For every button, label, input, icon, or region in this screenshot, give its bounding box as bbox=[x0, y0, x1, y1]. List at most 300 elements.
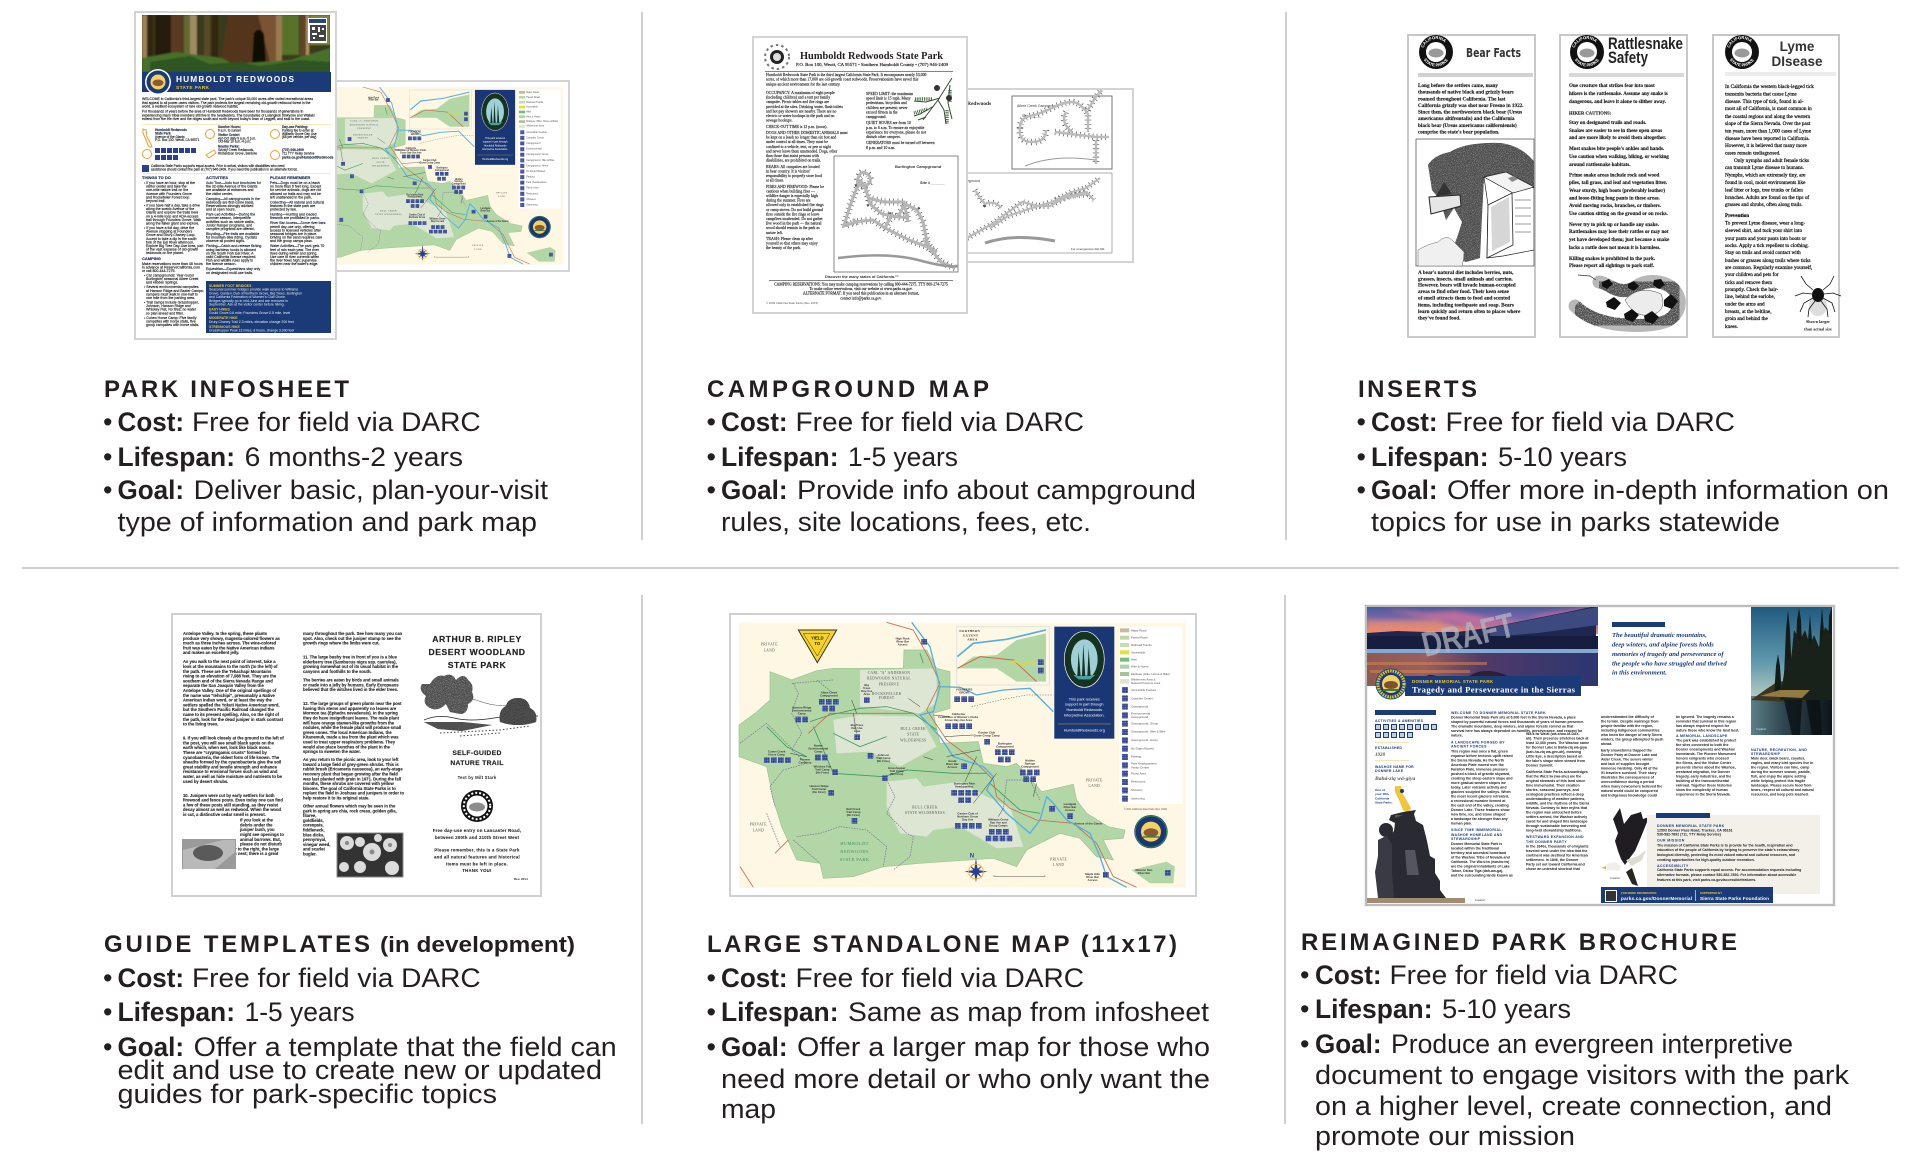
lifespan line: 5-10 years bbox=[1442, 994, 1571, 1024]
left column rules: and hot pay showers are nearby. There are no bbox=[766, 109, 836, 113]
map labels: Access bbox=[1065, 808, 1075, 812]
map labels: California bbox=[952, 712, 965, 716]
cost line: Free for field via DARC bbox=[796, 963, 1084, 993]
column: memorial landscape: westward migration, the Donner bbox=[1675, 770, 1731, 774]
heading: guide templates: GUIDE TEMPLATES bbox=[104, 931, 370, 958]
column: activities: for mountain bike riding. Cyclists bbox=[206, 236, 257, 240]
map labels: Day-Use bbox=[861, 689, 873, 693]
illustration: desert landscape bbox=[421, 675, 538, 736]
goal lines: Goal: bbox=[118, 1032, 184, 1062]
cost line: • bbox=[706, 963, 716, 993]
map labels: Natural Preserve Area bbox=[1131, 681, 1161, 685]
callout: hikes box: Grove, Garden Club of Northern Grove, Big Trees, Burlington bbox=[209, 291, 302, 295]
panel: park contact: features at this park, visit parks.ca.gov/accessiblefeatures. bbox=[1657, 878, 1756, 882]
cost line: Free for field via DARC bbox=[192, 963, 481, 993]
intro text: WELCOME to California's third-largest state park. The park's unique 53,000 acres offer varied recreational areas bbox=[142, 97, 313, 101]
map labels: Horse Camp bbox=[768, 752, 785, 756]
map labels: © 2011 California State Parks (Rev. 2020) bbox=[1124, 808, 1167, 811]
column: things to do: Make reservations more than 48 hours bbox=[142, 262, 203, 266]
panel: park contact: alternative formats, please contact 530-582-7892. For information about accessible bbox=[1657, 873, 1796, 877]
map labels: Paved Road bbox=[1131, 636, 1148, 640]
thumbnail: fold-out park map: Accessible bbox=[526, 106, 539, 109]
left column rules: wood should remain in the park as bbox=[766, 226, 820, 230]
lyme text: groin and behind the bbox=[1725, 316, 1768, 322]
map labels: Campground bbox=[996, 744, 1014, 748]
panel: campground map bbox=[706, 37, 1196, 537]
thumbnail: fold-out park map: Campfire Center bbox=[526, 137, 544, 140]
map labels: BULL CREEK bbox=[900, 727, 926, 731]
left column rules: allowed only in established fire rings bbox=[766, 203, 824, 207]
thumbnail: fold-out park map: HumboldtRedwoods.org bbox=[482, 158, 509, 161]
column: welcome and landscape: California. The Wá:š:iw (washo:iw) bbox=[1451, 860, 1509, 864]
lifespan line bbox=[706, 997, 1210, 1027]
right column rules: p.m. to 6 a.m. To ensure an enjoyable bbox=[866, 126, 925, 130]
left column rules: DOGS AND OTHER DOMESTIC ANIMALS must bbox=[766, 131, 849, 135]
right column rules: speed limit is 15 mph. Many bbox=[866, 97, 911, 101]
map labels: This park receives bbox=[1069, 697, 1100, 701]
column: things to do: beyond trail. bbox=[146, 199, 165, 203]
safety text: Prime snake areas include rock and wood bbox=[1569, 173, 1660, 179]
heading: inserts: INSERTS bbox=[1358, 376, 1477, 403]
column: things to do: one-mile nature trail on the bbox=[146, 188, 188, 192]
guide directions: Free day-use entry on Lancaster Road, bbox=[433, 828, 521, 833]
intro paragraph: Humboldt Redwoods State Park is the third largest California State Park. It encompasses nearly 53,000 bbox=[766, 73, 927, 78]
map labels: Day Use bbox=[962, 818, 974, 822]
cost line: Free for field via DARC bbox=[1390, 960, 1678, 990]
cost line: Cost: bbox=[118, 963, 184, 993]
column: donner party: people familiar with the region, bbox=[1601, 724, 1653, 728]
column: memorial landscape: nature those who know the land best. bbox=[1676, 728, 1739, 732]
column: welcome and landscape: SINCE TIME IMMEMORIAL: bbox=[1451, 828, 1503, 832]
map labels: River Bar bbox=[1064, 805, 1077, 809]
panel: park contact: ACCESSIBILITY bbox=[1657, 864, 1689, 868]
map labels: N bbox=[970, 854, 974, 860]
heading: guide templates: (in development) bbox=[380, 932, 575, 957]
goal lines: Goal: bbox=[721, 475, 788, 505]
column: please remember: permit day-use only, offering bbox=[270, 225, 314, 229]
column: memorial landscape: railroad. Together these histories bbox=[1676, 784, 1732, 788]
column: things to do: visitor center and take the bbox=[146, 185, 187, 189]
cost line: • bbox=[103, 407, 112, 437]
column: memorial landscape: Donner encampments and Washoe bbox=[1676, 748, 1735, 752]
map labels: Showers bbox=[1131, 788, 1143, 792]
map labels: Springs bbox=[1025, 761, 1036, 765]
column: things to do: THINGS TO DO bbox=[142, 175, 171, 180]
intro text: americanus altifrontalis) and the California bbox=[1418, 115, 1515, 122]
left column rules: sewage hookups. bbox=[766, 119, 793, 123]
thumbnail: fold-out park map bbox=[264, 81, 569, 271]
lyme text: sleeved shirt, and tuck your shirt into bbox=[1725, 228, 1802, 234]
callout: hikes box: and California Federation of Women's Club Grove. bbox=[209, 295, 286, 299]
lifespan line: Same as map from infosheet bbox=[848, 997, 1210, 1027]
column: nature and recreation: eagles, and many bird species live in bbox=[1751, 761, 1813, 765]
column: activities: the visitor center. bbox=[206, 192, 233, 196]
intro text: experiencing many tribal members still live in the headwaters. The boundaries of Lolangkok Sinkyone and Wailaki bbox=[142, 113, 315, 117]
thumbnail: back page campground maps: Redwoods bbox=[967, 101, 991, 107]
map labels: Area bbox=[864, 692, 870, 696]
map labels: LAND bbox=[764, 648, 775, 652]
illustration: rattlesnake bbox=[1575, 275, 1679, 325]
guide column 1: the path. These are the Tehachapi Mountains bbox=[183, 669, 272, 674]
map labels: Campground: Group bbox=[1131, 721, 1159, 725]
map labels: PRIVATE bbox=[1086, 778, 1103, 782]
map labels: Major Road bbox=[1131, 628, 1147, 632]
guide subtitle: SELF-GUIDED bbox=[452, 750, 502, 757]
map labels: Baxter bbox=[814, 743, 824, 747]
map labels: Hanson Ridge bbox=[809, 784, 829, 788]
column: culture and expansion: THE DONNER PARTY bbox=[1526, 840, 1567, 844]
column: memorial landscape: has always required respect for bbox=[1676, 724, 1730, 728]
thumbnail: fold-out park map: Restrooms bbox=[526, 192, 539, 195]
title bbox=[1608, 35, 1683, 67]
column: culture and expansion: wildlife, and the rhythms of the Sierra bbox=[1525, 802, 1589, 806]
guide column 2: replant the field in Joshuas and junipers in order to bbox=[303, 791, 404, 796]
column: donner party: who knew the danger of early Sierra bbox=[1600, 733, 1662, 737]
map labels: Campground: Hike & Bike bbox=[1131, 730, 1166, 734]
column: welcome and landscape: today. Later volcanic activity and bbox=[1451, 786, 1507, 790]
column: things to do: fork of the Eel River afternoon. bbox=[146, 240, 194, 244]
captions: Caption bbox=[1610, 876, 1621, 880]
column: things to do: Avenue with Founders Grove bbox=[146, 192, 192, 196]
guide directions: and all natural features and historical bbox=[434, 854, 520, 860]
cost line: • bbox=[1300, 960, 1309, 990]
column: things to do: Giants and explore the trails here bbox=[146, 211, 198, 215]
icons and visitor info bbox=[142, 125, 334, 172]
guide column 1: Antelope Valley. In the spring, these plants bbox=[183, 631, 268, 636]
column: welcome and landscape: a recessional moraine formed at bbox=[1451, 799, 1506, 803]
lyme text: ticks and remove them bbox=[1725, 280, 1772, 286]
icons and visitor info: ($8 per vehicle, per day) bbox=[282, 135, 316, 139]
column: welcome and landscape: more gradual western slopes we bbox=[1451, 781, 1506, 785]
map labels: High Rock bbox=[896, 636, 910, 640]
guide column 2: vinegar weed, bbox=[303, 842, 330, 847]
column: things to do: campers must walk in one-half to bbox=[146, 292, 198, 296]
map labels: AREA bbox=[967, 638, 978, 642]
map labels: LAND bbox=[1089, 784, 1100, 788]
column: things to do: • Several environmental campsites bbox=[144, 285, 199, 289]
column: welcome and landscape: Donner Memorial State Park is bbox=[1451, 842, 1502, 846]
left column rules: OCCUPANCY: A maximum of eight people bbox=[766, 91, 835, 95]
intro paragraph: unique ancient environment for the last century. bbox=[766, 82, 840, 86]
guide column 1: is cut, a distinctive cedar smell is present. bbox=[183, 812, 266, 817]
thumbnail: fold-out park map: Avenue of the Giants bbox=[487, 220, 510, 223]
map labels: (No Fires) bbox=[877, 759, 890, 763]
column: welcome and landscape: creating the steep eastern slope and bbox=[1451, 777, 1512, 781]
column: culture and expansion: traveled west under the idea that the bbox=[1526, 849, 1588, 853]
column: things to do: along the scenic Avenue of the bbox=[146, 207, 194, 211]
campground map: Burlington: Burlington Campground bbox=[895, 164, 942, 169]
lyme text: Stay on trails and avoid contact with bbox=[1725, 250, 1801, 256]
column: welcome and landscape: The dramatic mountains, deep winters, and alpine forests remind us that bbox=[1451, 724, 1574, 728]
goal lines bbox=[103, 475, 549, 537]
column: things to do: • Trail camps include Grasshopper, bbox=[144, 300, 199, 304]
footer text: To make online reservations, visit our website at www.parks.ca.gov. bbox=[809, 287, 913, 292]
panel: park contact: California State Parks supports equal access. For accommodation requests including bbox=[1657, 868, 1801, 872]
goal lines: Deliver basic, plan-your-visit bbox=[194, 475, 549, 505]
thumbnail: fold-out park map: Campground bbox=[452, 182, 466, 185]
lyme text: Prevention bbox=[1725, 213, 1749, 219]
column: culture and expansion: time immemorial. Their creation bbox=[1526, 784, 1580, 788]
map labels: Campground bbox=[1131, 705, 1149, 709]
thumbnail: fold-out park map: Parking bbox=[526, 176, 535, 179]
icons and visitor info: parks.ca.gov/HumboldtRedwoods bbox=[282, 156, 334, 160]
safety text: dangerous, and leave it alone to slither away. bbox=[1569, 99, 1667, 105]
guide column 2: goldfields, bbox=[303, 818, 324, 823]
map labels: Hike & Horse bbox=[1131, 665, 1149, 669]
right column rules: pedestrians, bicyclists and bbox=[866, 101, 907, 106]
icons and visitor info: Parking fee to enter at bbox=[282, 128, 313, 132]
column: activities: the 32-mile Avenue of the Giants bbox=[206, 185, 258, 189]
column: please remember: firearms are prohibited in parks. bbox=[270, 216, 320, 220]
quote: memories of tragedy and perseverance of bbox=[1612, 651, 1724, 658]
thumbnail: fold-out park map: CARL "A" ANDERSON bbox=[350, 120, 379, 123]
guide column 2: green cones. The local American Indians, the bbox=[303, 730, 392, 735]
map labels: Trail Camp bbox=[876, 756, 891, 760]
quote: deep winters, and alpine forests holds bbox=[1612, 642, 1714, 649]
panel: park contact bbox=[1647, 813, 1820, 894]
cost line: • bbox=[1356, 407, 1366, 437]
column: please remember: Use care in river currents when bbox=[270, 255, 319, 259]
map labels: Campground bbox=[820, 694, 838, 698]
goal lines: • bbox=[1300, 1029, 1309, 1059]
illustration: bald eagle bbox=[1601, 808, 1649, 886]
column: memorial landscape: presents stories about the Washoe, bbox=[1676, 766, 1736, 770]
map labels: NORTHERN bbox=[959, 629, 980, 633]
lyme text: bushes or grasses along trails where ticks bbox=[1725, 258, 1811, 264]
sidebar: activities and facts: ACTIVITIES & AMENITIES bbox=[1375, 719, 1424, 723]
sidebar: activities and facts: WASHOE NAME FOR bbox=[1375, 765, 1414, 769]
icons and visitor info: Apr-Oct daily 9 a.m.-5 p.m. bbox=[218, 136, 256, 140]
thumbnail: fold-out park map: WILDERNESS bbox=[372, 165, 390, 168]
map labels: LAND bbox=[1053, 863, 1064, 867]
map labels: LAND bbox=[753, 828, 764, 832]
column: activities: Fish and wildlife rules apply in bbox=[206, 259, 253, 263]
column: things to do: Explore Big Tree Day-Use Area, part bbox=[146, 244, 203, 248]
column: things to do: Grove and Drury-Chaney Loop. bbox=[146, 233, 196, 237]
map labels: support in part through bbox=[1065, 703, 1104, 707]
lifespan line: 5-10 years bbox=[1498, 442, 1627, 472]
diet text: However, bears will invade human-occupied bbox=[1418, 283, 1516, 289]
guide directions: between 200th and 210th Street West bbox=[435, 835, 519, 840]
column: welcome and landscape: STEWARDSHIP bbox=[1451, 837, 1481, 841]
map labels: Trail Camp bbox=[815, 767, 830, 771]
intro text: For thousands of years before the area of Humboldt Redwoods have been for thousands of generations in bbox=[142, 110, 303, 114]
column: things to do: group campsites with horse stalls. bbox=[146, 323, 199, 327]
guide column 1: As you walk to the next point of interest, take a bbox=[183, 659, 276, 664]
guide cover title: DESERT WOODLAND bbox=[428, 647, 526, 657]
map labels: BULL CREEK bbox=[912, 805, 938, 809]
right column rules: exceed fifteen in the bbox=[866, 110, 898, 114]
column: welcome and landscape: Farallon Plate, immense pressure bbox=[1451, 768, 1508, 772]
map labels: (No Fires) bbox=[890, 772, 903, 776]
column: welcome and landscape: This region was once a flat, green bbox=[1451, 750, 1508, 754]
map labels: River Bar bbox=[946, 762, 959, 766]
title: Safety bbox=[1608, 49, 1649, 67]
thumbnail: fold-out park map: FOREST bbox=[358, 136, 368, 139]
map labels: Environmental bbox=[792, 708, 812, 712]
map labels: Interpretive Association. bbox=[1064, 713, 1105, 717]
column: welcome and landscape: Tahoe, Dá'aw Tiga (dah-aw-ga), bbox=[1451, 869, 1503, 873]
lifespan line: Lifespan: bbox=[721, 442, 838, 472]
lyme text: leaf litter or logs, tree trunks or fallen bbox=[1725, 186, 1803, 193]
icon: seal bbox=[1570, 35, 1604, 69]
panel: park contact: education of the people of California by helping to preserve the state's extraordinary bbox=[1657, 848, 1799, 852]
left column rules: or camp stoves. Do not build ground bbox=[766, 208, 823, 212]
guide column 2: blooms. The goal of California State Parks is to bbox=[303, 786, 396, 791]
map labels: Maxxon Run bbox=[1136, 868, 1153, 872]
column: welcome and landscape: territory and ancestral homeland bbox=[1451, 851, 1506, 855]
guide column 1: American Indian word, or at least the way the bbox=[183, 698, 273, 703]
column: things to do: so plan ahead and filter. bbox=[146, 311, 184, 315]
guide column 1: used by desert shrubs. bbox=[183, 779, 228, 784]
quote: the people who have struggled and thrived bbox=[1612, 660, 1727, 667]
banner: park name: HUMBOLDT REDWOODS bbox=[176, 74, 294, 84]
column: welcome and landscape: WASHOE HOMELAND AND bbox=[1451, 833, 1503, 837]
column: nature and recreation: resources, and keep pets leashed. bbox=[1751, 792, 1809, 796]
guide column 2: spot. Also, check out the juniper stump to see the bbox=[303, 636, 402, 641]
guide column 1: sheaths formed by the cyanobacteria give the soil bbox=[183, 760, 281, 765]
thumbnail: fold-out park map: Grove Group Camp bbox=[419, 161, 441, 164]
left column rules: TRASH: Please clean up after bbox=[766, 237, 814, 241]
guide column 2: many throughout the park. See how many you can bbox=[303, 631, 403, 636]
map labels: REDWOODS NATURAL bbox=[867, 677, 911, 681]
map labels: PRIVATE bbox=[750, 823, 767, 827]
guide column 1: to the living trees. bbox=[183, 722, 218, 727]
heading: reimagined park brochure: REIMAGINED PARK BROCHURE bbox=[1301, 929, 1737, 956]
right column rules: GENERATORS must be turned off between bbox=[866, 141, 935, 145]
column: activities: Fishing—Catch-and-release fishing bbox=[206, 244, 261, 248]
map labels: River Bar bbox=[896, 639, 910, 643]
map labels: Albee Creek bbox=[821, 691, 838, 695]
column: donner party: Alder Creek. The severe winter bbox=[1601, 758, 1653, 762]
map labels: Cemetery bbox=[799, 760, 812, 764]
right column rules: 8 p.m. and 10 a.m. bbox=[866, 146, 895, 150]
column: donner party: illustrates the consequences of bbox=[1601, 776, 1655, 780]
column: please remember: Hunting—Hunting and loaded bbox=[270, 213, 317, 217]
thumbnail: fold-out park map: Wilderness Area bbox=[526, 125, 545, 128]
icons and visitor info: State Park bbox=[155, 131, 171, 135]
column: culture and expansion: California State Parks acknowledges bbox=[1526, 770, 1588, 774]
icons and visitor info: Williams Grove Day Use bbox=[282, 132, 317, 136]
map labels: Maple Hills bbox=[1085, 872, 1100, 876]
safety text: Please report all sightings to park staff. bbox=[1569, 263, 1655, 269]
safety text: and are more likely to avoid them altogether. bbox=[1569, 135, 1667, 141]
thumbnail: fold-out park map: Picnic Area bbox=[526, 187, 539, 190]
map labels: TO bbox=[814, 641, 821, 646]
guide column 2: As you return to the picnic area, look to your left bbox=[303, 757, 399, 762]
thumbnail: fold-out park map: Springs bbox=[455, 180, 464, 183]
goal lines: edit and use to create new or updated bbox=[118, 1055, 602, 1085]
map labels: Area bbox=[854, 729, 861, 733]
panel: large standalone map bbox=[706, 614, 1210, 1124]
thumbnail: fold-out park map: Campground bbox=[526, 142, 541, 145]
icons and visitor info: P.O. Box 100, Weott, CA 95571 bbox=[155, 138, 200, 142]
map labels: Pioneer bbox=[800, 757, 811, 761]
cost line: Cost: bbox=[118, 407, 184, 437]
photo: wildflowers bbox=[337, 833, 403, 877]
guide column 2: used to treat upper respiratory problems. They bbox=[303, 740, 396, 744]
column: things to do: Avenue stopping at Founders bbox=[146, 230, 193, 234]
map labels: Environmental bbox=[808, 746, 828, 750]
column: things to do: redwoods on the planet. bbox=[146, 251, 184, 255]
map labels: Wilderness Area & bbox=[1131, 677, 1156, 681]
column: memorial landscape: tragedy, early industries, and the bbox=[1676, 774, 1731, 778]
map labels: CARL "A" ANDERSON bbox=[868, 671, 910, 675]
column: memorial landscape: A MEMORIAL LANDSCAPE bbox=[1676, 734, 1728, 738]
safety text: Never try to pick up or handle any snake. bbox=[1569, 222, 1660, 228]
guide column 1: the path, look for the dead juniper in stark contrast bbox=[183, 717, 284, 722]
map labels: Accessible Feature bbox=[1131, 688, 1157, 692]
right column rules: campground. bbox=[866, 115, 886, 119]
guide subtitle: NATURE TRAIL bbox=[450, 760, 504, 767]
thumbnail: fold-out park map: Federation of Women's Clubs bbox=[395, 149, 427, 152]
guide column 2: believed that the witches lived in the elder trees. bbox=[303, 687, 398, 692]
column: nature and recreation: fish, and enjoy the alpine setting bbox=[1751, 774, 1806, 778]
guide column 1: please do not disturb bbox=[240, 842, 282, 847]
thumbnail: fold-out park map: Park Headquarters bbox=[526, 181, 547, 184]
column: welcome and landscape: a landscape far stronger than any bbox=[1451, 817, 1508, 821]
icon: seal: CALIFORNIA bbox=[1572, 36, 1597, 48]
cost line: Cost: bbox=[721, 407, 788, 437]
column: please remember: children near the water's edge. bbox=[270, 262, 318, 266]
guide column 2: pennyroyal, bbox=[303, 837, 326, 842]
icon: seal: CALIFORNIA bbox=[1421, 36, 1446, 48]
column: culture and expansion: ah). Their presence stretches back at bbox=[1526, 736, 1589, 740]
lyme text: However, it is believed that many more bbox=[1725, 143, 1807, 149]
column: things to do: • Car campgrounds: Year-round bbox=[144, 274, 194, 278]
map labels: Day Use and bbox=[990, 821, 1007, 825]
column: culture and expansion: cared for and shaped this landscape bbox=[1526, 820, 1588, 824]
left column rules: fires outside the fire rings or leave bbox=[766, 212, 820, 216]
lyme text: line, behind the earlobe, bbox=[1725, 294, 1775, 300]
column: welcome and landscape: shaped by powerful natural forces and thousands of years of human presence. bbox=[1451, 720, 1584, 724]
column: donner party: natural world could be conquered bbox=[1601, 789, 1658, 793]
left column rules: campsite. Picnic tables and fire rings are bbox=[766, 100, 829, 104]
column: things to do: • Cuneo Horse Camp: Five family bbox=[144, 316, 197, 320]
map labels: Gould bbox=[948, 759, 957, 763]
map labels: REDWOODS bbox=[840, 849, 869, 854]
column: welcome and landscape: are the original inhabitants of Lake bbox=[1451, 865, 1510, 869]
photo: pines and lake bbox=[1751, 607, 1832, 735]
lyme text: promptly. Check the hair- bbox=[1725, 287, 1778, 293]
map labels: Campground: Horse bbox=[1131, 738, 1158, 742]
column: culture and expansion: ecological practices reflect a deep bbox=[1526, 792, 1585, 796]
diet text: of smell attracts them to food and scented bbox=[1418, 296, 1510, 302]
map labels: YIELD bbox=[811, 635, 824, 640]
lifespan line: 6 months-2 years bbox=[245, 442, 463, 472]
cost line: Free for field via DARC bbox=[796, 407, 1084, 437]
column: activities: on the South Fork Eel River. A bbox=[206, 251, 254, 255]
column: donner party: overconfidence during a period bbox=[1601, 780, 1654, 784]
title: DIsease bbox=[1771, 54, 1823, 69]
column: welcome and landscape: pushed a block of granite skyward, bbox=[1451, 772, 1510, 776]
sidebar: activities and facts: Bahá-ziq wá-gíya bbox=[1374, 776, 1415, 782]
thumbnail: fold-out park map: Campground: Horse bbox=[526, 164, 549, 167]
column: things to do: or call 800-444-7275. bbox=[142, 269, 176, 273]
left column rules: than those that assist persons with bbox=[766, 154, 819, 158]
map labels: GROVE bbox=[959, 691, 970, 695]
icons and visitor info: 711 TTY Relay Service bbox=[282, 152, 315, 156]
lyme text: knees. bbox=[1725, 324, 1738, 330]
card: rattlesnake safety bbox=[1559, 34, 1688, 338]
map labels: HumboldtRedwoods.org bbox=[1064, 729, 1105, 733]
column: please remember: feet of rain each year. The river bbox=[270, 248, 320, 252]
map labels: Trees bbox=[863, 686, 871, 690]
intro text: Long before the settlers came, many bbox=[1418, 83, 1498, 89]
column: activities: using barbless hooks is allowed bbox=[206, 248, 256, 252]
map labels: Access bbox=[1088, 878, 1098, 882]
column: activities: observe all posted signs. bbox=[206, 239, 245, 243]
